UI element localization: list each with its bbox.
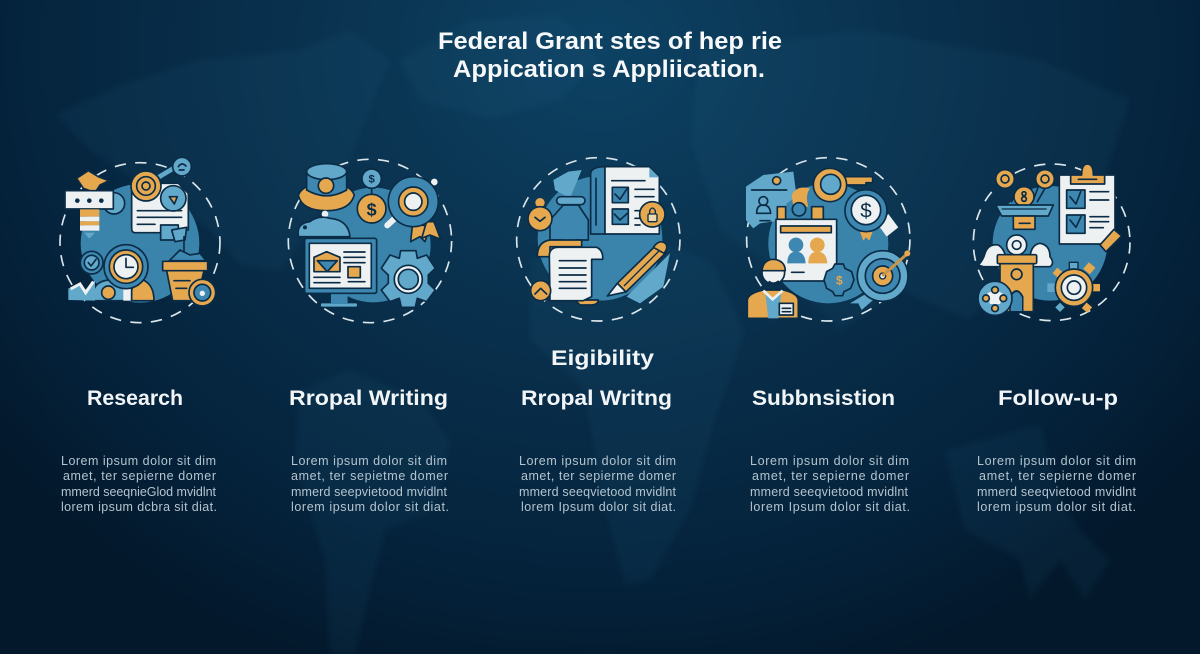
description: mmerd seepvietood mvidlnt <box>291 485 448 499</box>
description: mmerd seeqvietood mvidlnt <box>977 485 1137 499</box>
panel: research <box>60 157 220 514</box>
funnel tray <box>996 205 1053 216</box>
tower <box>1000 263 1033 312</box>
panel: proposal writing <box>288 159 452 514</box>
description: lorem ipsum dolor sit diat. <box>977 500 1136 514</box>
heading: Research <box>87 387 183 410</box>
description: Lorem ipsum dolor sit dim <box>61 454 216 468</box>
monitor <box>321 303 357 307</box>
chevron badge <box>531 281 551 301</box>
connector <box>157 168 173 178</box>
description: Lorem ipsum dolor sit dim <box>291 454 447 468</box>
description: Lorem ipsum dolor sit dim <box>977 454 1136 468</box>
document <box>605 167 659 234</box>
title <box>438 28 782 83</box>
id card <box>746 172 797 228</box>
paper plane <box>878 214 898 237</box>
clipboard <box>1059 175 1115 244</box>
pencil <box>1100 229 1122 252</box>
people behind <box>792 187 810 207</box>
check circle <box>80 251 103 274</box>
description: amet, ter sepierne domer <box>979 469 1136 483</box>
description: amet, ter sepietme domer <box>291 469 448 483</box>
keyboard bar <box>65 191 113 209</box>
envelope <box>314 252 340 272</box>
person clock <box>535 198 545 207</box>
heading: Rropal Writng <box>521 387 672 410</box>
magnifier handle <box>387 217 397 225</box>
gear <box>824 264 854 296</box>
coins <box>1012 187 1045 202</box>
disc <box>1007 235 1027 255</box>
heading: Subbnsistion <box>752 387 895 410</box>
panel: submission <box>746 158 910 514</box>
gear disc <box>189 279 216 306</box>
heading: Follow-u-p <box>998 387 1118 410</box>
heading: Rropal Writing <box>289 387 448 410</box>
description: lorem ipsum dolor sit diat. <box>291 500 449 514</box>
pencil <box>627 253 670 303</box>
document <box>776 219 837 281</box>
ribbon <box>411 223 430 242</box>
envelope <box>161 225 178 240</box>
panel: follow-up <box>973 164 1137 514</box>
description: lorem Ipsum dolor sit diat. <box>750 500 910 514</box>
plant <box>169 250 206 261</box>
description: lorem ipsum dcbra sit diat. <box>61 500 217 514</box>
description <box>750 454 910 514</box>
bird <box>77 171 109 193</box>
heading: eligibility: Eigibility <box>551 347 654 370</box>
badge <box>388 177 438 227</box>
hat <box>298 183 354 211</box>
gear <box>1047 262 1100 313</box>
gear <box>381 251 435 307</box>
title: Federal Grant stes of hep rie <box>438 28 782 55</box>
key magnifier <box>843 177 873 185</box>
description: amet, ter sepierme domer <box>521 469 676 483</box>
description <box>61 454 217 514</box>
gear <box>103 193 125 214</box>
folder <box>591 167 605 234</box>
icon: research cluster <box>60 157 220 323</box>
pot <box>167 271 204 301</box>
description: amet, ter sepierne domer <box>752 469 909 483</box>
cloud <box>298 217 350 237</box>
description: Lorem ipsum dolor sit dim <box>519 454 676 468</box>
icon: submission cluster: $ <box>836 273 843 287</box>
title: Appication s Appliication. <box>453 56 765 83</box>
clock <box>104 245 148 289</box>
badge <box>161 186 186 211</box>
person <box>747 290 798 318</box>
document <box>132 183 188 233</box>
target <box>131 171 161 201</box>
people <box>93 280 140 301</box>
description: mmerd seeqvietood mvidlnt <box>519 485 677 499</box>
lock <box>640 202 665 227</box>
description: amet, ter sepierne domer <box>63 469 216 483</box>
description: Lorem ipsum dolor sit dim <box>750 454 909 468</box>
orange base <box>537 240 582 257</box>
target <box>850 293 875 310</box>
icon: eligibility cluster <box>517 158 680 321</box>
pillar figure <box>553 170 582 198</box>
description <box>291 454 449 514</box>
bulb base <box>80 209 99 217</box>
description: lorem Ipsum dolor sit diat. <box>521 500 676 514</box>
dollar badge <box>845 190 887 232</box>
scroll <box>575 300 598 305</box>
dollar coins <box>362 169 381 188</box>
small orb <box>173 157 191 176</box>
description: mmerd seeqnieGlod mvidlnt <box>61 485 217 499</box>
icon: submission cluster: $ <box>860 199 872 222</box>
blue network <box>978 281 1012 315</box>
icon: proposal cluster: $ <box>367 199 377 219</box>
icon: follow-up cluster <box>973 164 1130 321</box>
icon: proposal cluster <box>288 159 452 323</box>
description <box>519 454 677 514</box>
description <box>977 454 1137 514</box>
panel: eligibility <box>517 158 680 514</box>
clouds <box>978 245 1007 267</box>
icon: submission cluster <box>746 158 910 321</box>
icon: proposal cluster: $ <box>368 174 375 186</box>
description: mmerd seeqvietood mvidlnt <box>750 485 909 499</box>
